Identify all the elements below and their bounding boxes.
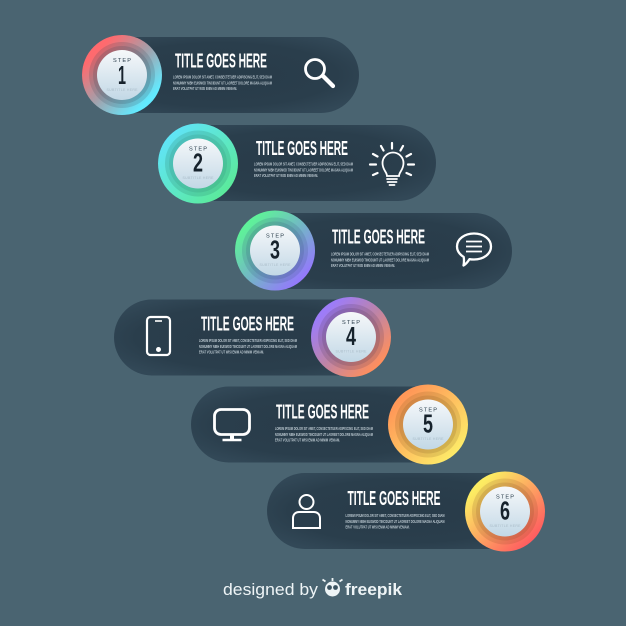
badge: step 2: SUBTITLE HERE <box>182 176 214 180</box>
text block: step 4: LOREM IPSUM DOLOR SIT AMET, CONSECTETUER ADIPISCING ELIT, SED DIAM <box>199 338 297 343</box>
icon: monitor <box>214 410 250 440</box>
badge: step 4: 4 <box>346 321 356 351</box>
text block: step 3 <box>331 252 429 268</box>
badge: step 3: 3 <box>270 234 280 264</box>
text block: step 5: ERAT VOLUTPAT UT WISI ENIM AD MINIM VENIAM. <box>275 438 340 443</box>
text block: step 3: NONUMMY NIBH EUISMOD TINCIDUNT UT LAOREET DOLORE MAGNA ALIQUAM <box>331 257 429 262</box>
text block: step 1 <box>173 74 272 91</box>
text block: step 6: NONUMMY NIBH EUISMOD TINCIDUNT UT LAOREET DOLORE MAGNA ALIQUAM <box>346 519 445 524</box>
badge: step 6: STEP <box>496 494 514 500</box>
text block: step 2: ERAT VOLUTPAT UT WISI ENIM AD MINIM VENIAM. <box>254 173 318 178</box>
footer: freepik credit: freepik <box>345 580 403 599</box>
title: step 1: TITLE GOES HERE <box>175 50 267 72</box>
badge: step 1: 1 <box>118 60 126 90</box>
footer: freepik credit <box>223 578 403 599</box>
text block: step 6: ERAT VOLUTPAT UT WISI ENIM AD MINIM VENIAM. <box>346 525 410 530</box>
text block: step 4 <box>199 338 297 355</box>
panel: step 4 <box>114 297 391 377</box>
text block: step 1: LOREM IPSUM DOLOR SIT AMET, CONSECTETUER ADIPISCING ELIT, SED DIAM <box>173 74 272 80</box>
badge: step 3: SUBTITLE HERE <box>260 263 291 267</box>
text block: step 3: ERAT VOLUTPAT UT WISI ENIM AD MINIM VENIAM. <box>331 263 395 268</box>
badge: step 6 <box>465 472 545 552</box>
panel: step 5 <box>191 384 468 464</box>
badge: step 6: 6 <box>500 496 510 526</box>
title: step 2: TITLE GOES HERE <box>256 138 348 160</box>
text block: step 4: NONUMMY NIBH EUISMOD TINCIDUNT UT LAOREET DOLORE MAGNA ALIQUAM <box>199 344 297 349</box>
text block: step 6: LOREM IPSUM DOLOR SIT AMET, CONSECTETUER ADIPISCING ELIT, SED DIAM <box>346 513 445 518</box>
text block: step 2 <box>254 162 353 178</box>
text block: step 1: NONUMMY NIBH EUISMOD TINCIDUNT UT LAOREET DOLORE MAGNA ALIQUAM <box>173 80 272 85</box>
badge: step 5: STEP <box>419 408 437 414</box>
badge: step 1 <box>82 35 162 115</box>
badge: step 2 <box>158 124 238 204</box>
badge: step 4 <box>311 297 391 377</box>
text block: step 2: NONUMMY NIBH EUISMOD TINCIDUNT UT LAOREET DOLORE MAGNA ALIQUAM <box>254 167 353 172</box>
title: step 5: TITLE GOES HERE <box>276 402 369 424</box>
badge: step 4: SUBTITLE HERE <box>336 350 367 354</box>
icon: light bulb <box>370 143 414 185</box>
icon: magnifier <box>306 60 333 86</box>
badge: step 5: 5 <box>423 408 433 438</box>
text block: step 2: LOREM IPSUM DOLOR SIT AMET, CONSECTETUER ADIPISCING ELIT, SED DIAM <box>254 162 353 166</box>
text block: step 3: LOREM IPSUM DOLOR SIT AMET, CONSECTETUER ADIPISCING ELIT, SED DIAM <box>331 252 429 256</box>
badge: step 6: SUBTITLE HERE <box>490 524 521 528</box>
badge: step 1: SUBTITLE HERE <box>106 88 138 92</box>
text block: step 6 <box>346 513 445 530</box>
title: step 3: TITLE GOES HERE <box>332 226 425 248</box>
panel: step 3 <box>235 210 512 290</box>
badge: step 3 <box>235 210 315 290</box>
text block: step 1: ERAT VOLUTPAT UT WISI ENIM AD MINIM VENIAM. <box>173 86 237 91</box>
icon: speech bubble <box>457 234 491 266</box>
badge: step 1: STEP <box>113 58 131 64</box>
badge: step 2: 2 <box>193 148 203 178</box>
badge: step 5: SUBTITLE HERE <box>412 437 444 441</box>
icon: smartphone <box>147 317 170 355</box>
footer: freepik credit: designed by <box>223 581 319 599</box>
badge: step 4: STEP <box>342 320 360 326</box>
panel: step 6 <box>267 472 545 552</box>
text block: step 5: NONUMMY NIBH EUISMOD TINCIDUNT UT LAOREET DOLORE MAGNA ALIQUAM <box>275 432 373 437</box>
badge: step 3: STEP <box>266 234 284 240</box>
icon: freepik mascot <box>322 578 342 596</box>
title: step 6: TITLE GOES HERE <box>348 488 440 510</box>
text block: step 5 <box>275 426 373 443</box>
badge: step 2: STEP <box>189 146 207 152</box>
badge: step 5 <box>388 384 468 464</box>
panel: step 1 <box>82 35 359 115</box>
title: step 4: TITLE GOES HERE <box>201 314 294 336</box>
text block: step 4: ERAT VOLUTPAT UT WISI ENIM AD MINIM VENIAM. <box>199 350 264 355</box>
panel: step 2 <box>158 124 436 204</box>
icon: user <box>293 495 320 528</box>
text block: step 5: LOREM IPSUM DOLOR SIT AMET, CONSECTETUER ADIPISCING ELIT, SED DIAM <box>275 426 373 431</box>
